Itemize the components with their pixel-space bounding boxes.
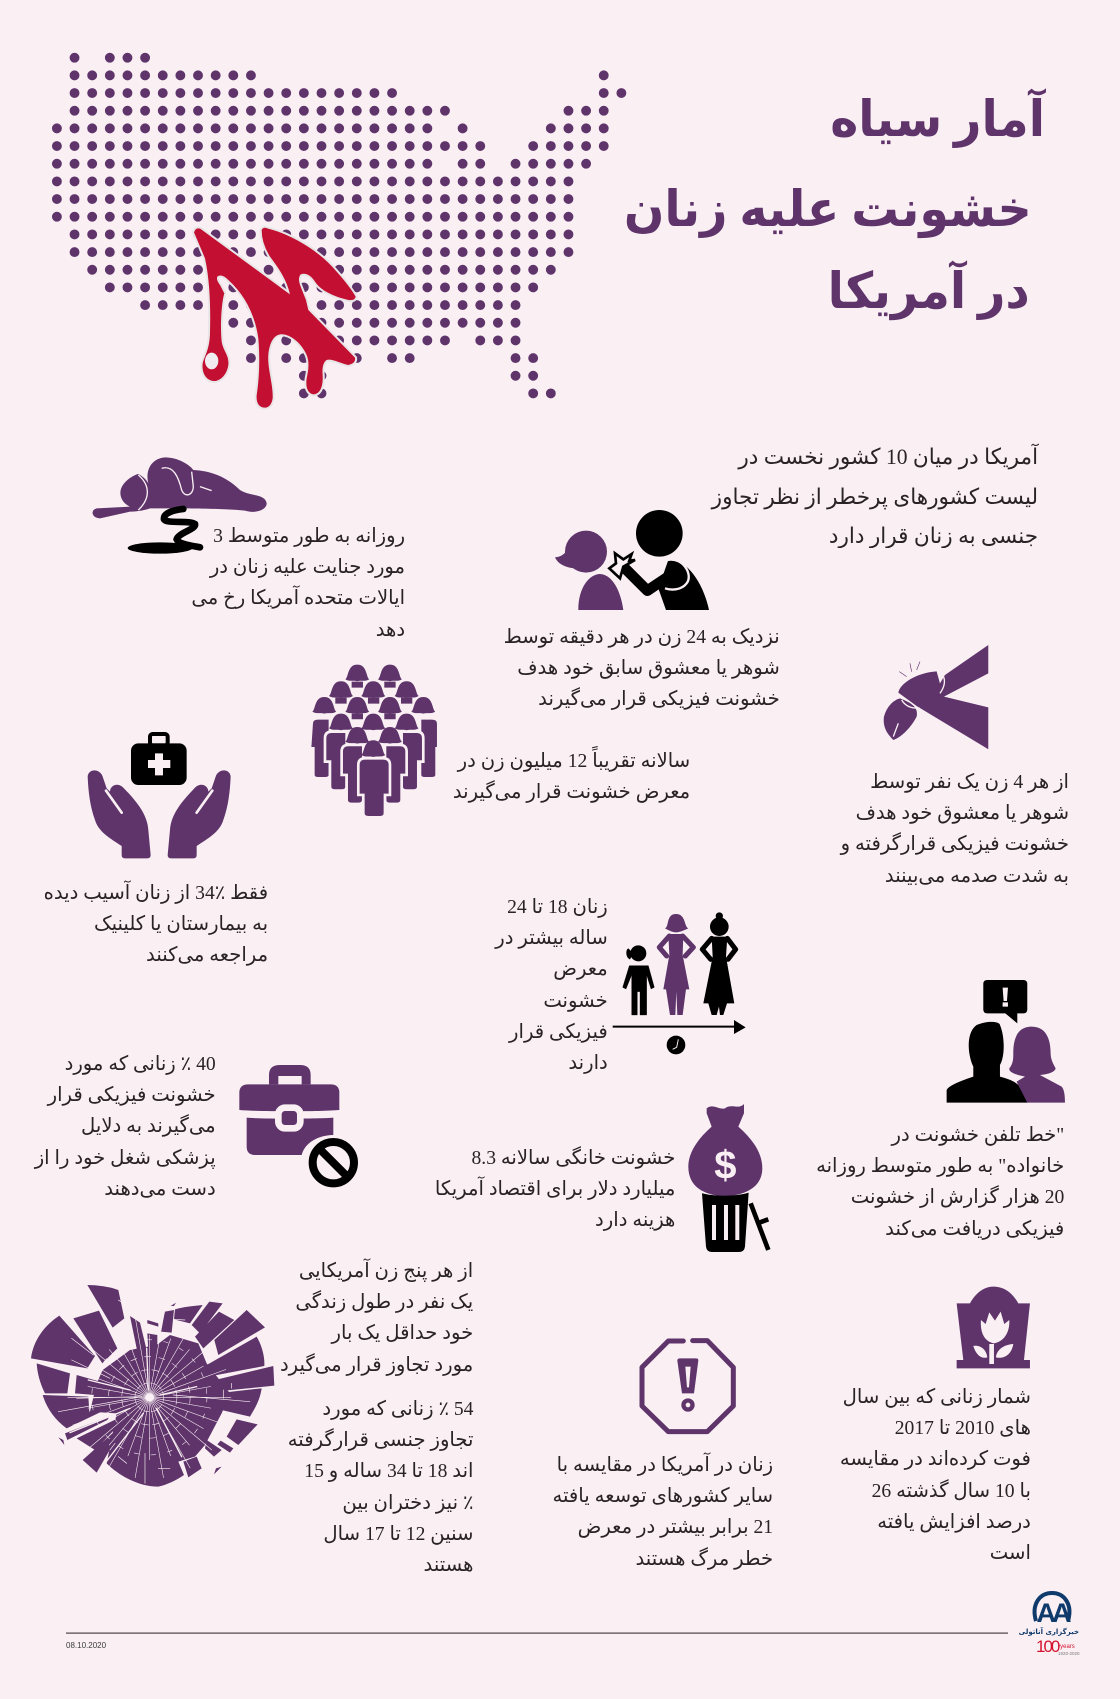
text: 21 times risk: خطر مرگ هستند — [635, 1548, 773, 1570]
logo: Anadolu Agency 100 years: AA — [1036, 1598, 1071, 1628]
text: 8.3 billion: هزینه دارد — [595, 1209, 675, 1231]
icon: shattered heart — [31, 1285, 274, 1487]
text: 8.3 billion: خشونت خانگی سالانه 8.3 — [471, 1147, 675, 1169]
text: 21 times risk — [552, 1452, 773, 1570]
date: 08.10.2020 — [66, 1641, 107, 1650]
text: 40 percent lose jobs: دست می‌دهند — [105, 1178, 216, 1200]
title: خشونت علیه زنان — [624, 181, 1032, 237]
icon: age groups timeline — [613, 912, 746, 1054]
logo: Anadolu Agency 100 years: خبرگزاری آناتولی — [1019, 1627, 1079, 1636]
logo: Anadolu Agency 100 years: •years — [1058, 1644, 1075, 1650]
text: top 10 countries: آمریکا در میان 10 کشور نخست در — [738, 444, 1038, 469]
text: one in four: شوهر یا معشوق خود هدف — [856, 802, 1069, 824]
text: only 34 percent — [44, 880, 268, 966]
text: deaths 2010-2017: با 10 سال گذشته 26 — [872, 1480, 1031, 1502]
icon: woman lying on ground with blood — [93, 457, 267, 554]
icon: hands holding first aid kit — [88, 734, 231, 858]
text: 54 percent: 54 ٪ زنانی که مورد — [322, 1398, 473, 1420]
text: 24 women per minute — [504, 626, 780, 710]
icon: wrist being gripped — [884, 645, 988, 749]
text: only 34 percent: مراجعه می‌کنند — [146, 944, 268, 966]
logo: Anadolu Agency 100 years: 1920-2020 — [1058, 1651, 1080, 1656]
text: 3 femicides daily: روزانه به طور متوسط 3 — [213, 525, 405, 547]
text: ages 18 to 24: دارند — [569, 1052, 608, 1074]
text: 3 femicides daily: ایالات متحده آمریکا رخ می — [191, 587, 405, 609]
icon: warning octagon — [642, 1341, 733, 1432]
text: deaths 2010-2017: فوت کرده‌اند در مقایسه — [840, 1448, 1031, 1470]
text: hotline: فیزیکی دریافت می‌کند — [885, 1218, 1064, 1240]
icon: person with alert bubble — [947, 980, 1065, 1103]
text: hotline: خانواده" به طور متوسط روزانه — [816, 1155, 1064, 1177]
text: 12 million yearly: معرض خشونت قرار می‌گیرند — [453, 781, 690, 803]
map: dotted USA — [57, 58, 622, 393]
text: 40 percent lose jobs: می‌گیرند به دلایل — [81, 1115, 216, 1137]
text: 54 percent: سنین 12 تا 17 سال — [323, 1523, 473, 1545]
text: hotline: "خط تلفن خشونت در — [891, 1124, 1064, 1146]
text: one in five: مورد تجاوز قرار می‌گیرد — [280, 1354, 473, 1376]
text: 40 percent lose jobs: 40 ٪ زنانی که مورد — [65, 1053, 216, 1075]
text: 24 women per minute: شوهر یا معشوق سابق خود هدف — [517, 657, 780, 679]
text: 54 percent: اند 18 تا 34 ساله و 15 — [304, 1460, 473, 1482]
logo: Anadolu Agency 100 years: 100 — [1036, 1637, 1060, 1656]
icon: money bag over trash bin: $ — [714, 1143, 736, 1187]
text: deaths 2010-2017 — [840, 1386, 1031, 1564]
text: ages 18 to 24 — [494, 896, 608, 1074]
text: one in five — [280, 1258, 473, 1376]
text: only 34 percent: به بیمارستان یا کلینیک — [94, 913, 268, 935]
icon: crowd of women — [310, 665, 438, 817]
text: ages 18 to 24: ساله بیشتر در — [496, 927, 608, 949]
text: top 10 countries: لیست کشورهای پرخطر از نظر تجاوز — [712, 484, 1038, 508]
text: one in four: از هر 4 زن یک نفر توسط — [870, 771, 1069, 793]
text: only 34 percent: فقط ٪34 از زنان آسیب دیده — [44, 882, 268, 904]
text: deaths 2010-2017: درصد افزایش یافته — [877, 1511, 1031, 1533]
text: ages 18 to 24: زنان 18 تا 24 — [507, 896, 608, 918]
icon: money bag over trash bin — [688, 1104, 768, 1252]
text: 54 percent: هستند — [423, 1554, 473, 1576]
text: hotline: 20 هزار گزارش از خشونت — [850, 1186, 1064, 1208]
text: 40 percent lose jobs: پزشکی شغل خود را از — [35, 1147, 216, 1169]
text: 8.3 billion: میلیارد دلار برای اقتصاد آمریکا — [435, 1178, 675, 1200]
text: 54 percent: تجاوز جنسی قرارگرفته — [287, 1429, 473, 1451]
title: در آمریکا — [828, 263, 1030, 319]
icon: blood splash on map — [194, 228, 356, 408]
title — [624, 88, 1046, 320]
text: 24 women per minute: نزدیک به 24 زن در هر دقیقه توسط — [504, 626, 780, 648]
icon: briefcase with prohibition sign — [239, 1065, 354, 1183]
text: 40 percent lose jobs — [34, 1053, 216, 1200]
text: deaths 2010-2017: است — [990, 1542, 1031, 1564]
logo: Anadolu Agency 100 years — [1019, 1593, 1080, 1656]
text: 3 femicides daily: مورد جنایت علیه زنان در — [210, 556, 405, 578]
text: 40 percent lose jobs: خشونت فیزیکی قرار — [48, 1084, 216, 1106]
icon: tombstone with flower — [957, 1287, 1030, 1368]
text: 12 million yearly: سالانه تقریباً 12 میلیون زن در — [457, 750, 690, 772]
text: 3 femicides daily — [191, 525, 405, 641]
text: 21 times risk: 21 برابر بیشتر در معرض — [578, 1516, 773, 1538]
text: ages 18 to 24: خشونت — [544, 990, 608, 1012]
text: ages 18 to 24: معرض — [554, 958, 608, 980]
text: one in five: یک نفر در طول زندگی — [295, 1291, 473, 1313]
footer rule — [66, 1632, 1008, 1634]
text: top 10 countries — [710, 443, 1039, 548]
text: 21 times risk: زنان در آمریکا در مقایسه با — [557, 1454, 773, 1476]
title: آمار سیاه — [830, 91, 1045, 147]
text: 24 women per minute: خشونت فیزیکی قرار می‌گیرند — [538, 688, 780, 710]
text: deaths 2010-2017: های 2010 تا 2017 — [895, 1417, 1031, 1439]
text: one in four: خشونت فیزیکی قرارگرفته و — [841, 833, 1069, 855]
text: 54 percent: ٪ نیز دختران بین — [342, 1492, 473, 1514]
text: one in four — [840, 771, 1069, 887]
text: 21 times risk: سایر کشورهای توسعه یافته — [552, 1485, 773, 1507]
text: one in five: از هر پنج زن آمریکایی — [299, 1260, 473, 1282]
text: 8.3 billion — [435, 1146, 675, 1231]
icon: man hitting woman — [555, 510, 709, 610]
text: one in five: خود حداقل یک بار — [331, 1322, 473, 1344]
text: deaths 2010-2017: شمار زنانی که بین سال — [843, 1386, 1031, 1408]
text: top 10 countries: جنسی به زنان قرار دارد — [829, 523, 1038, 548]
text: 54 percent — [287, 1398, 474, 1576]
text: one in four: به شدت صدمه می‌بینند — [885, 865, 1069, 887]
text: ages 18 to 24: فیزیکی قرار — [509, 1021, 608, 1043]
text: hotline — [816, 1124, 1064, 1240]
text: 3 femicides daily: دهد — [376, 619, 405, 641]
text: 12 million yearly — [453, 746, 690, 803]
